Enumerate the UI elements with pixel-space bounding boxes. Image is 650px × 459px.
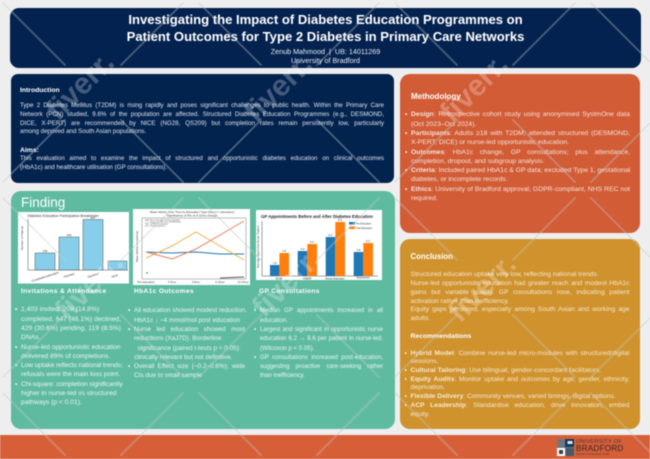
chart: participation breakdown bar chart: 208 (43, 249, 48, 253)
conclusion text (410, 270, 630, 322)
recommendations bullet list: Cultural Tailoring: Use bilingual, gender-concordant facilitators. (410, 367, 601, 374)
logo: University of Bradford (556, 438, 624, 457)
recommendations bullet list: sessions. (410, 358, 438, 365)
panel: findings (11, 191, 395, 429)
chart: participation breakdown bar chart (17, 211, 130, 284)
text: GP consultations: education 6.2 → 8.6 per patient in nurse-led. (260, 335, 383, 342)
chart: GP appointments grouped bars: GP Appointments Before and After Diabetes Education (261, 214, 373, 219)
text: HbA1c outcomes: All education showed modest reduction. (134, 307, 247, 314)
text: invitations and attendance: Chi-square: completion significantly (21, 381, 123, 388)
chart: GP appointments grouped bars: Average Appointments per Patient (256, 225, 260, 268)
introduction text: DICE, X-PERT) are recommended by NICE (NG28, QS209) but completion rates remain persistently low, particularly (20, 120, 384, 127)
heading: HbA1c outcomes: HbA1c Outcomes (134, 288, 194, 294)
aims text: This evaluation aimed to examine the impact of structured and opportunistic diabetes education on clinical outcomes (20, 155, 384, 162)
chart: GP appointments grouped bars: Post-Education (356, 227, 373, 230)
panel: introduction and aims (11, 74, 394, 183)
introduction text: Type 2 Diabetes Mellitus (T2DM) is rising rapidly and poses significant challenges to public health. Within the Primary Care (20, 102, 384, 109)
text: GP consultations: than inefficiency. (260, 372, 305, 379)
recommendations bullet list: Equity Audits: Monitor uptake and outcomes by age, gender, ethnicity, (410, 376, 630, 383)
methodology bullet list: required. (411, 195, 438, 202)
conclusion text: adults. (410, 315, 430, 322)
methodology bullet list (404, 110, 631, 202)
chart: GP appointments grouped bars (255, 209, 383, 281)
watermark overlay: fiverr. (442, 248, 523, 329)
chart: mean HbA1c line chart: Structured education (DESMOND) (150, 221, 181, 224)
text: GP consultations: (Wilcoxon p < 0.05). (260, 345, 314, 352)
chart: participation breakdown bar chart: 647 (91, 216, 96, 220)
text: HbA1c outcomes: CIs due to small sample (134, 372, 202, 379)
heading: introduction: Introduction (20, 87, 60, 94)
heading: GP consultations: GP Consultations (259, 288, 320, 294)
methodology bullet list: Criteria: Included paired HbA1c & GP data; excluded Type 1, gestational (411, 167, 630, 174)
text: HbA1c outcomes: reductions (XaJ7D). Borderline (134, 335, 221, 342)
heading: aims: Aims: (20, 146, 39, 154)
chart: mean HbA1c line chart: Significance of Pre vs 6-12mo change (167, 214, 218, 218)
text: GP consultations: GP consultations increased post-education, (260, 354, 383, 361)
text: invitations and attendance: Low uptake reflects national trends; (21, 362, 123, 369)
chart: participation breakdown bar chart: Completed education (31, 270, 60, 283)
aims text: (HbA1c) and healthcare utilisation (GP consultations). (20, 164, 167, 171)
chart: GP appointments grouped bars: 3.8 (357, 248, 361, 252)
chart: GP appointments grouped bars: Nurse-Educator (325, 276, 345, 280)
introduction text: among deprived and South Asian populations. (20, 128, 146, 135)
chart: participation breakdown bar chart: Declined (87, 271, 100, 279)
logo tagline: MAKING KNOWLEDGE WORK (576, 452, 610, 456)
chart: GP appointments grouped bars: 5.3 (366, 239, 370, 243)
chart: GP appointments grouped bars: 6.2 (329, 233, 333, 237)
chart: participation breakdown bar chart: Planned (63, 272, 75, 279)
chart: participation breakdown bar chart: 429 (67, 233, 72, 237)
chart: mean HbA1c line chart: X-PERT programme (150, 224, 169, 226)
panel: conclusion and recommendations (400, 239, 640, 429)
text: invitations and attendance: refusals were the main loss point. (21, 371, 120, 378)
conclusion text: gains but variable quality. GP consultations rose, indicating patient (410, 289, 630, 296)
text: invitations and attendance (14, 306, 124, 406)
text: HbA1c outcomes: Nurse led education showed most (134, 326, 245, 333)
aims text (20, 154, 384, 171)
chart: mean HbA1c line chart: Nurse-led opportunistic education (150, 219, 180, 222)
chart: GP appointments grouped bars: 8.6 (338, 218, 342, 222)
text: invitations and attendance: DNAs. (21, 334, 40, 341)
title (126, 12, 525, 44)
chart: mean HbA1c line chart: Pre-education (137, 280, 155, 284)
text: invitations and attendance: completed, 647 (46.1%) declined, (21, 316, 121, 323)
icon: university shield (556, 438, 575, 457)
methodology bullet list: completion, dropout, and subgroup analysis. (411, 158, 544, 165)
text: invitations and attendance: delivered 89% of completions. (21, 353, 110, 360)
conclusion text: Equity gaps persisted, especially among South Asian and working age (410, 306, 630, 313)
text: invitations and attendance: higher in nurse-led vs structured (21, 390, 117, 397)
watermark overlay: fiverr. (246, 243, 327, 324)
conclusion text: Structured education uptake very low, reflecting national trends. (410, 271, 599, 278)
text: HbA1c outcomes: significance (paired t-tests p ≈ 0.05): (138, 345, 241, 352)
chart: mean HbA1c line chart: 3-6mo (192, 280, 200, 284)
logo wordmark: UNIVERSITY OF (576, 439, 622, 445)
footer band (0, 435, 650, 459)
chart: GP appointments grouped bars: 5.0 (310, 240, 314, 244)
chart: mean HbA1c line chart: Mean HbA1c Over Time by Education Type (Day 0 = education) (150, 210, 234, 214)
chart: mean HbA1c line chart: Mean HbA1c (mmol/mol) (135, 231, 139, 262)
author and affiliation: University of Bradford (291, 56, 360, 65)
title: Investigating the Impact of Diabetes Education Programmes on (128, 12, 523, 27)
text: invitations and attendance: 1,403 invited: 208 (14.8%) (21, 306, 99, 313)
author and affiliation (270, 46, 381, 66)
text: invitations and attendance: pathways (p < 0.01). (21, 399, 82, 406)
chart: mean HbA1c line chart: DICE programme (150, 226, 166, 228)
heading: finding: Finding (21, 195, 65, 210)
author and affiliation: Zenub Mahmood | UB: 14011269 (271, 46, 380, 56)
introduction text: Network (PCN) studied, 9.6% of the population are affected. Structured Diabetes Education Programmes (e.g., DESMOND, (20, 111, 384, 118)
methodology bullet list: diabetes, or incomplete records. (411, 176, 508, 183)
text: HbA1c outcomes: Overall Effect size (~0.2–0.6%); wide (134, 363, 245, 370)
text: HbA1c outcomes: HbA1c ↓ ~4 mmol/mol post education (134, 317, 240, 324)
chart: mean HbA1c line chart: 12-24mo (237, 280, 249, 284)
chart: GP appointments grouped bars: 3.6 (282, 249, 287, 253)
methodology bullet list: Participants: Adults ≥18 with T2DM; attended structured (DESMOND, (411, 130, 630, 137)
chart: mean HbA1c line chart: 0-3mo (168, 280, 176, 284)
methodology bullet list: Ethics: University of Bradford approval; GDPR-compliant, NHS REC not (411, 186, 630, 193)
chart: GP appointments grouped bars: Structured (357, 276, 370, 280)
chart: mean HbA1c line chart: 6-12mo (215, 280, 225, 284)
logo wordmark: Bradford: BRADFORD (576, 444, 624, 452)
text: HbA1c outcomes (128, 307, 247, 379)
heading: recommendations: Recommendations (410, 333, 471, 340)
chart: participation breakdown bar chart: Diabetes Education Participation Breakdown (28, 214, 98, 218)
header banner (10, 8, 641, 68)
heading: methodology: Methodology (411, 92, 461, 101)
recommendations bullet list (404, 350, 630, 418)
text: HbA1c outcomes: clinically relevant but not definitive. (134, 354, 232, 361)
chart: mean HbA1c line chart (132, 208, 251, 286)
recommendations bullet list: equity. (410, 411, 430, 418)
text: invitations and attendance: Nurse-led opportunistic education (21, 344, 121, 351)
conclusion text: Nurse-led opportunistic education had greater reach and modest HbA1c (410, 280, 630, 287)
chart: participation breakdown bar chart: Number of Patients (20, 225, 24, 250)
watermark overlay: fiverr. (40, 46, 121, 127)
chart: GP appointments grouped bars: Pre-Education (356, 222, 372, 226)
recommendations bullet list: ACP Leadership: Standardise education, drive innovation, embed (410, 402, 629, 409)
methodology bullet list: (Oct 2023–Oct 2024). (411, 121, 476, 128)
methodology bullet list: X-PERT, DICE) or nurse-led opportunistic education. (411, 139, 569, 146)
text: GP consultations (254, 306, 384, 379)
title: Patient Outcomes for Type 2 Diabetes in Primary Care Networks (127, 29, 524, 44)
introduction text (20, 102, 384, 136)
text: GP consultations: Median GP appointments increased in all (260, 307, 383, 314)
text: invitations and attendance: 429 (30.6%) pending, 119 (8.5%) (21, 325, 121, 332)
text: GP consultations: Largest and significant in opportunistic nurse (260, 326, 383, 333)
chart: GP appointments grouped bars: 4.0 (301, 247, 305, 251)
methodology bullet list: Outcomes: HbA1c change, GP consultations; plus attendance, (411, 149, 630, 156)
text: GP consultations: suggesting proactive care-seeking rather (260, 363, 383, 370)
watermark overlay: fiverr. (434, 48, 515, 129)
text: GP consultations: education. (260, 317, 288, 324)
recommendations bullet list: Flexible Delivery: Community venues, varied timings, digital options. (410, 393, 616, 400)
heading: invitations and attendance: Invitations & Attendance (21, 288, 106, 294)
chart: GP appointments grouped bars: DICE (276, 276, 282, 280)
methodology bullet list: Design: Retrospective cohort study using anonymised SystmOne data (411, 111, 630, 118)
panel: methodology (400, 74, 640, 233)
recommendations bullet list: Hybrid Model: Combine nurse-led micro-modules with structured/digital (410, 350, 630, 357)
conclusion text: activation rather than inefficiency. (410, 298, 509, 305)
heading: conclusion: Conclusion (410, 252, 453, 261)
chart: GP appointments grouped bars: 1.8 (273, 261, 277, 265)
recommendations bullet list: deprivation. (410, 384, 445, 391)
watermark overlay: fiverr. (49, 246, 130, 327)
watermark overlay: fiverr. (238, 48, 319, 129)
chart: GP appointments grouped bars: XPERT (302, 276, 312, 280)
chart: participation breakdown bar chart: DNA (111, 273, 118, 279)
